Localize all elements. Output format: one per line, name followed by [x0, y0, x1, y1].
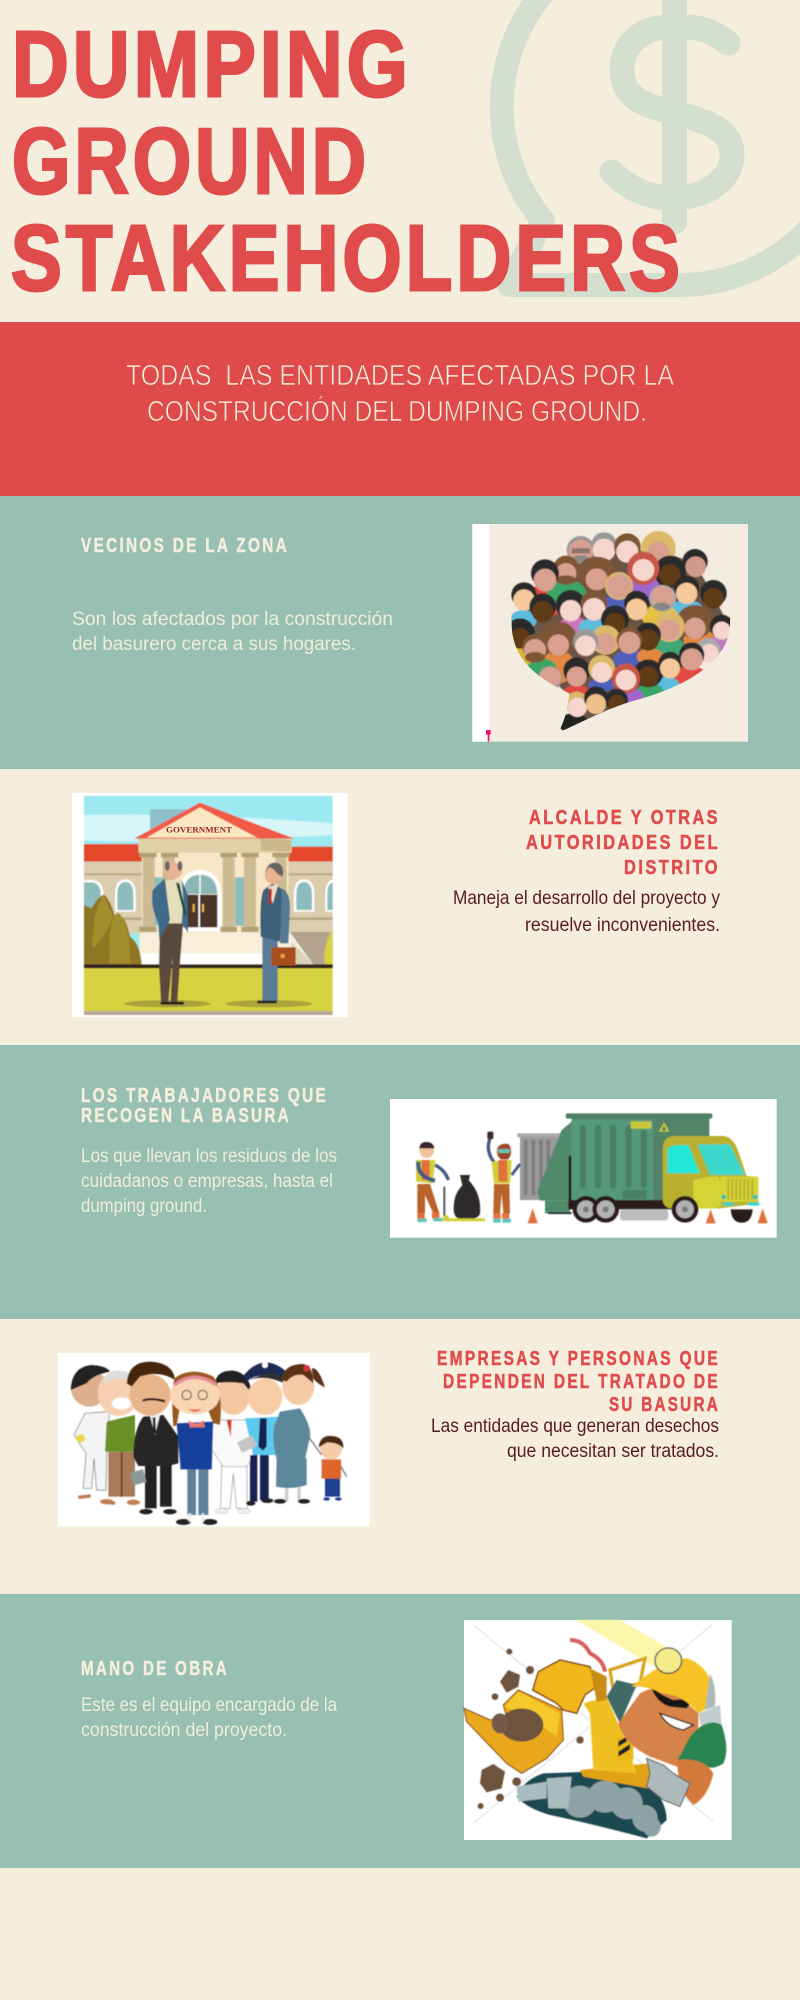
panel: intro banner: [0, 322, 800, 496]
heading: alcalde: [526, 807, 720, 879]
title: [11, 12, 684, 310]
text: vecinos description: Son los afectados por la construcción: [72, 609, 393, 630]
heading: empresas: SU BASURA: [609, 1394, 720, 1416]
footer band: [0, 1868, 800, 2000]
title: GROUND: [12, 109, 370, 213]
heading: trabajadores: [81, 1085, 328, 1127]
image: government building with two officials: [72, 793, 348, 1017]
text: mano de obra description: construcción del proyecto.: [81, 1720, 287, 1741]
heading: alcalde: DISTRITO: [624, 857, 720, 879]
text: trabajadores description: Los que llevan los residuos de los: [81, 1146, 337, 1167]
heading: trabajadores: RECOGEN LA BASURA: [81, 1105, 291, 1127]
panel: vecinos de la zona: [0, 496, 800, 769]
panel: los trabajadores: [0, 1045, 800, 1319]
image: government building with two officials: GOVERNMENT: [166, 826, 233, 835]
heading: alcalde: AUTORIDADES DEL: [526, 832, 720, 854]
image: crowd in speech bubble: [472, 524, 748, 742]
text: empresas description: que necesitan ser tratados.: [507, 1441, 719, 1462]
text: trabajadores description: cuidadanos o empresas, hasta el: [81, 1171, 333, 1192]
text: vecinos description: del basurero cerca a sus hogares.: [72, 634, 356, 655]
panel: mano de obra: [0, 1594, 800, 1868]
panel: empresas y personas: [0, 1319, 800, 1594]
heading: mano de obra: MANO DE OBRA: [81, 1658, 229, 1680]
heading: trabajadores: LOS TRABAJADORES QUE: [81, 1085, 328, 1107]
text: alcalde description: [453, 888, 720, 936]
text: mano de obra description: [81, 1695, 337, 1741]
panel: alcalde y autoridades: [0, 769, 800, 1045]
image: garbage truck with workers: [390, 1099, 777, 1238]
text: empresas description: Las entidades que generan desechos: [431, 1416, 719, 1437]
text: trabajadores description: [81, 1146, 337, 1217]
text: alcalde description: Maneja el desarrollo del proyecto y: [453, 888, 720, 909]
image: group of people: [58, 1353, 370, 1526]
heading: alcalde: ALCALDE Y OTRAS: [529, 807, 720, 829]
text: vecinos description: [72, 609, 393, 655]
icon: dollar coin speech bubble: [502, 0, 800, 285]
text: empresas description: [431, 1416, 719, 1462]
text: mano de obra description: Este es el equipo encargado de la: [81, 1695, 337, 1716]
heading: empresas: DEPENDEN DEL TRATADO DE: [443, 1371, 720, 1393]
heading: empresas: [437, 1348, 720, 1416]
heading: vecinos: VECINOS DE LA ZONA: [81, 535, 289, 557]
image: excavator character: [462, 1620, 732, 1840]
text: trabajadores description: dumping ground.: [81, 1196, 207, 1217]
text: alcalde description: resuelve inconvenientes.: [525, 915, 720, 936]
panel: intro banner: CONSTRUCCIÓN DEL DUMPING GROUND.: [147, 395, 647, 428]
heading: empresas: EMPRESAS Y PERSONAS QUE: [437, 1348, 720, 1370]
panel: intro banner: TODAS LAS ENTIDADES AFECTADAS POR LA: [126, 360, 675, 392]
title: DUMPING: [12, 12, 412, 116]
